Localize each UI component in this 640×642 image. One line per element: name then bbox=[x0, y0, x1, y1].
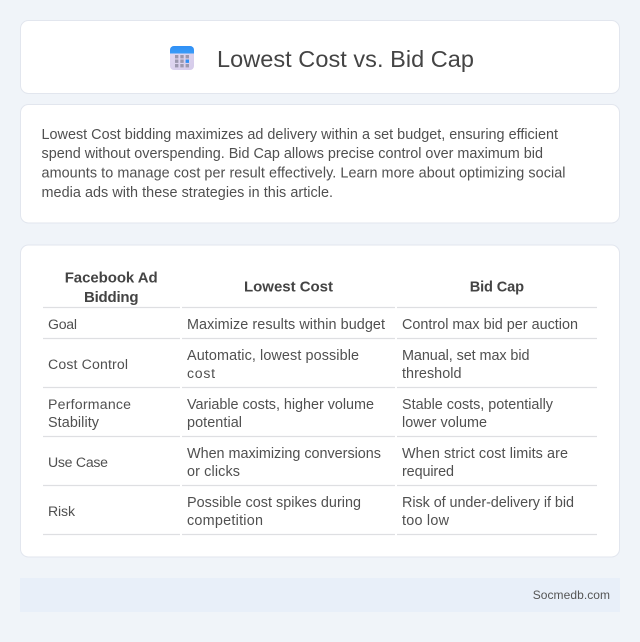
table row: Use Case: When strict cost limits are bbox=[402, 446, 568, 462]
table column headers: Bidding bbox=[84, 289, 138, 306]
table row: Performance Stability: Stability bbox=[48, 415, 100, 431]
table column headers: Facebook Ad bbox=[65, 270, 158, 287]
table column headers: Bid Cap bbox=[470, 280, 524, 296]
table row: Performance Stability: potential bbox=[187, 415, 242, 431]
intro paragraph: spend without overspending. Bid Cap allows precise control over maximum bid bbox=[42, 146, 543, 162]
table row: Goal: Goal bbox=[48, 316, 77, 332]
table row: Risk: too low bbox=[402, 513, 450, 529]
table column headers: Lowest Cost bbox=[244, 279, 333, 296]
footer bar bbox=[20, 578, 620, 612]
table row: Use Case: or clicks bbox=[187, 464, 240, 480]
table row: Use Case: required bbox=[402, 464, 454, 480]
panel: intro text card bbox=[20, 104, 620, 223]
intro paragraph bbox=[42, 127, 566, 201]
table row: Risk: competition bbox=[187, 513, 263, 529]
footer source text: Socmedb.com bbox=[533, 588, 610, 602]
table row: Performance Stability: Stable costs, potentially bbox=[402, 397, 554, 413]
table row: Risk: Risk of under-delivery if bid bbox=[402, 495, 574, 511]
table row: Performance Stability bbox=[48, 396, 554, 431]
icon: calendar bbox=[170, 46, 194, 70]
table row: Cost Control: threshold bbox=[402, 366, 462, 382]
panel: comparison table card bbox=[20, 245, 620, 557]
table row: Cost Control: Cost Control bbox=[48, 356, 128, 372]
table row: Risk: Risk bbox=[48, 503, 76, 519]
intro paragraph: amounts to manage cost per result effectively. Learn more about optimizing social bbox=[42, 166, 566, 182]
table column headers bbox=[65, 270, 524, 306]
title: Lowest Cost vs. Bid Cap bbox=[217, 46, 474, 72]
intro paragraph: Lowest Cost bidding maximizes ad delivery within a set budget, ensuring efficient bbox=[42, 127, 558, 143]
table row: Cost Control bbox=[48, 348, 530, 382]
intro paragraph: media ads with these strategies in this article. bbox=[42, 185, 333, 201]
table row: Cost Control: Manual, set max bid bbox=[402, 348, 530, 364]
table row: Risk bbox=[48, 495, 574, 529]
table row: Use Case bbox=[48, 446, 568, 480]
table row: Goal: Maximize results within budget bbox=[187, 317, 385, 333]
table row: Goal bbox=[48, 316, 578, 333]
table row: Use Case: Use Case bbox=[48, 454, 108, 470]
table row: Cost Control: cost bbox=[187, 365, 215, 381]
table row: Performance Stability: lower volume bbox=[402, 415, 487, 431]
panel: title card bbox=[20, 20, 620, 94]
table row: Cost Control: Automatic, lowest possible bbox=[187, 348, 359, 364]
table row: Risk: Possible cost spikes during bbox=[187, 495, 361, 511]
table row: Performance Stability: Variable costs, higher volume bbox=[187, 397, 374, 413]
table row: Performance Stability: Performance bbox=[48, 396, 131, 412]
table row: Use Case: When maximizing conversions bbox=[187, 446, 381, 462]
table row: Goal: Control max bid per auction bbox=[402, 317, 578, 333]
